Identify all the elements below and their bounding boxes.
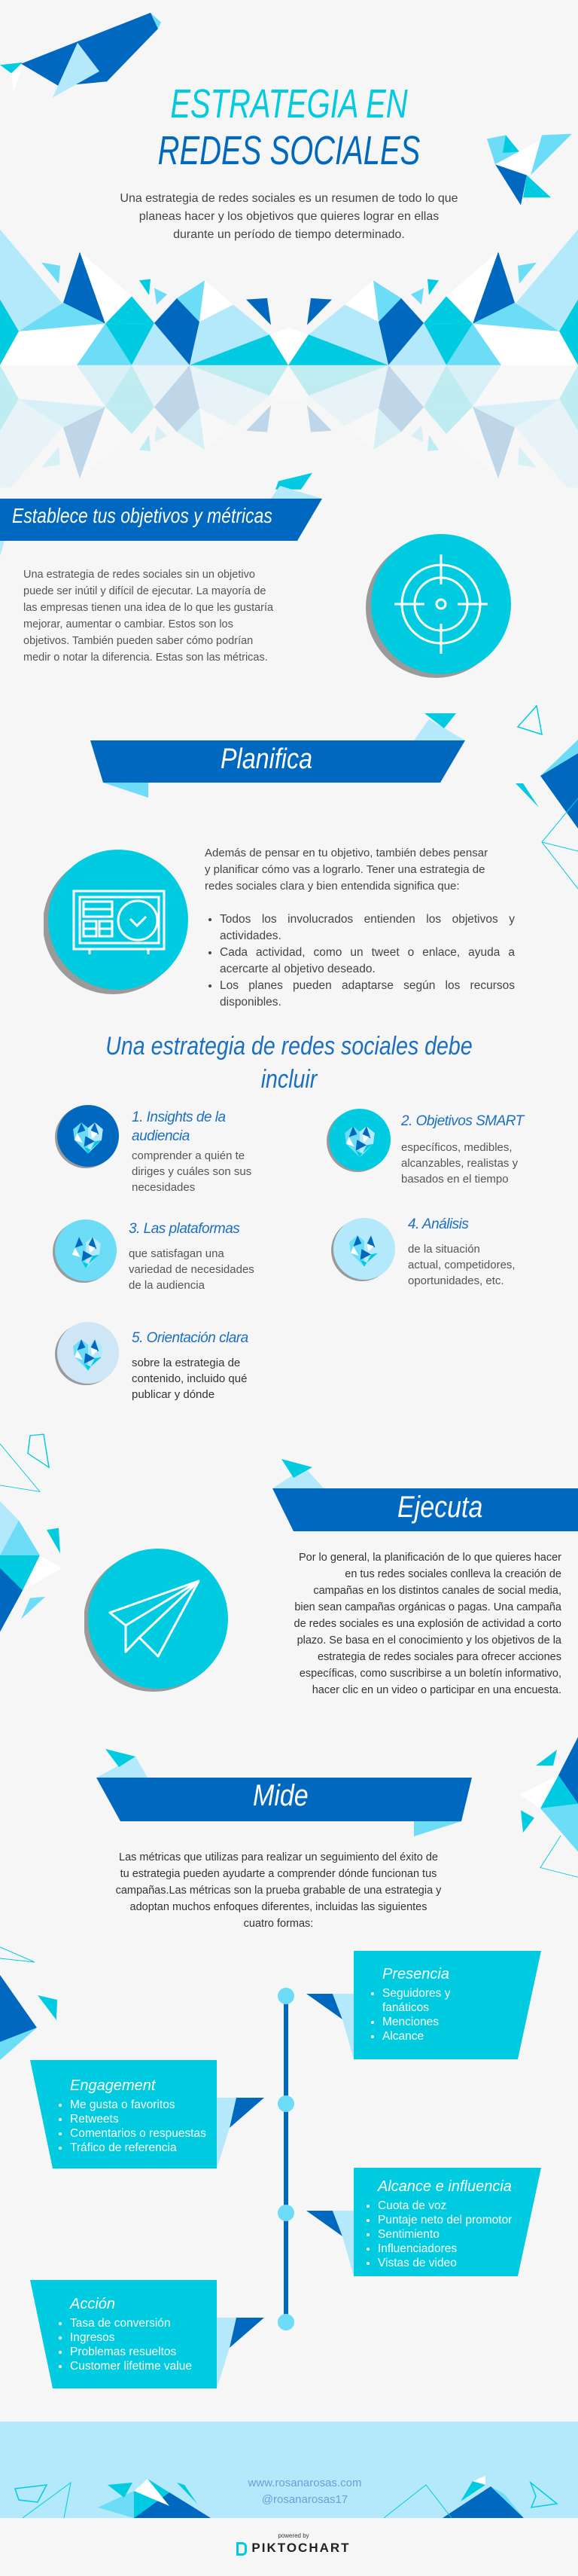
icon: heart 5 (55, 1322, 119, 1385)
box: accion: Problemas resueltos (70, 2346, 176, 2358)
banner: establece (0, 486, 322, 556)
left deco 3 (0, 1975, 37, 2042)
box: engagement: Comentarios o respuestas (70, 2127, 206, 2140)
intro text (120, 192, 458, 241)
text: ejecuta: específicas, como suscribirse a un boletín informativo, (300, 1668, 561, 1680)
item 2: smart: específicos, medibles, (401, 1141, 513, 1154)
item 5: orientacion: sobre la estrategia de (132, 1357, 240, 1369)
text: ejecuta: campañas en los distintos canales de social media, (313, 1585, 561, 1597)
intro text: planeas hacer y los objetivos que quieres lograr en ellas (139, 210, 439, 223)
item 2: smart: alcanzables, realistas y (401, 1157, 518, 1170)
text: objetivos: mejorar, aumentar o cambiar. Estos son los (23, 618, 233, 630)
text: mide: campañas.Las métricas son la prueba grabable de una estrategia y (116, 1885, 441, 1897)
box: engagement: Me gusta o favoritos (70, 2098, 175, 2111)
text: ejecuta: plazo. Se basa en el conocimiento y los objetivos de la (297, 1634, 561, 1647)
item 1: insights: comprender a quién te (132, 1149, 245, 1162)
box: alcance: Sentimiento (378, 2228, 440, 2241)
box: presencia (306, 1951, 541, 2059)
item 5: orientacion: contenido, incluido qué (132, 1372, 247, 1385)
title (158, 81, 420, 173)
item 2: smart: basados en el tiempo (401, 1173, 509, 1186)
box: alcance: Alcance e influencia (378, 2178, 512, 2195)
item 3: plataformas: 3. Las plataformas (129, 1221, 239, 1237)
item 1: insights: necesidades (132, 1181, 195, 1194)
piktochart logo: PIKTOCHART (251, 2541, 351, 2555)
intro text: durante un período de tiempo determinado. (173, 228, 405, 241)
item 3: plataformas: que satisfagan una (129, 1247, 224, 1260)
box: engagement: Retweets (70, 2113, 119, 2126)
text: objetivos: medir o notar la diferencia. Estas son las métricas. (23, 652, 268, 664)
text: ejecuta: de redes sociales es una explosión de actividad a corto (294, 1618, 561, 1630)
text: planifica: Además de pensar en tu objetivo, también debes pensar (205, 847, 488, 859)
item 5: orientacion (55, 1322, 248, 1401)
icon: heart 4 (331, 1218, 395, 1281)
text: planifica: y planificar cómo vas a lograrlo. Tener una estrategia de (205, 863, 485, 876)
icon: heart 2 (327, 1109, 391, 1172)
box: accion: Customer lifetime value (70, 2360, 192, 2373)
item 3: plataformas (53, 1219, 254, 1292)
text: ejecuta: estrategia de redes sociales para ofrecer acciones (318, 1651, 561, 1663)
icon: paper plane (84, 1549, 228, 1692)
box: presencia: Seguidores y fanáticos (382, 1987, 450, 2014)
heading: debe incluir: Una estrategia de redes sociales debe (105, 1032, 473, 1061)
item 1: insights: 1. Insights de la audiencia (132, 1109, 226, 1144)
icon: heart 1 (55, 1105, 119, 1168)
text: objetivos (23, 569, 274, 664)
item 4: analisis (331, 1216, 516, 1287)
item 3: plataformas: de la audiencia (129, 1279, 205, 1292)
box: accion: Ingresos (70, 2331, 114, 2344)
item 1: insights: diriges y cuáles son sus (132, 1165, 251, 1178)
icon: heart 3 (53, 1219, 117, 1283)
intro text: Una estrategia de redes sociales es un resumen de todo lo que (120, 192, 458, 205)
box: engagement (30, 2060, 264, 2169)
box: accion (30, 2280, 264, 2388)
banner: mide: Mide (253, 1779, 309, 1812)
background decorations (0, 12, 578, 2060)
text: mide: Las métricas que utilizas para realizar un seguimiento del éxito de (119, 1851, 438, 1863)
left deco (0, 1434, 578, 1877)
item 5: orientacion: publicar y dónde (132, 1388, 214, 1401)
item 3: plataformas: variedad de necesidades (129, 1263, 254, 1276)
item 5: orientacion: 5. Orientación clara (132, 1330, 248, 1346)
heading: debe incluir (105, 1032, 473, 1094)
banner: planifica (90, 713, 465, 798)
banner: mide (96, 1749, 472, 1836)
text: planifica: redes sociales clara y bien entendida significa que: (205, 880, 460, 893)
footer contacts (248, 2477, 361, 2506)
box: alcance: Vistas de video (378, 2257, 457, 2269)
title: ESTRATEGIA EN (170, 81, 408, 127)
banner: planifica: Planifica (221, 743, 312, 775)
text: mide (116, 1851, 441, 1930)
title: REDES SOCIALES (158, 128, 420, 173)
icon: calendar (44, 850, 188, 994)
text: planifica: Todos los involucrados entienden los objetivos y actividades. (220, 913, 515, 942)
text: mide: tu estrategia pueden ayudarte a comprender dónde funcionan tus (120, 1868, 437, 1880)
box: presencia: Alcance (382, 2030, 424, 2043)
box: presencia: Presencia (382, 1966, 449, 1982)
item 4: analisis: de la situación (408, 1243, 480, 1256)
item 4: analisis: actual, competidores, (408, 1259, 516, 1271)
text: planifica (205, 847, 515, 1009)
text: ejecuta: bien sean campañas orgánicas o pagas. Una campaña (294, 1601, 561, 1613)
box: alcance: Cuota de voz (378, 2199, 446, 2212)
text: objetivos: puede ser inútil y difícil de ejecutar. La mayoría de (23, 585, 266, 597)
text: objetivos: objetivos. También pueden saber cómo podrían (23, 635, 253, 647)
item 2: smart: 2. Objetivos SMART (401, 1113, 524, 1129)
text: objetivos: las empresas tienen una idea de lo que les gustaría (23, 602, 273, 614)
box: engagement: Tráfico de referencia (70, 2141, 177, 2154)
text: ejecuta (294, 1552, 561, 1696)
text: planifica: Los planes pueden adaptarse según los recursos disponibles. (220, 979, 515, 1009)
text: mide: adoptan muchos enfoques diferentes, incluidas las siguientes (129, 1901, 427, 1913)
banner: ejecuta (272, 1459, 578, 1531)
item 4: analisis: 4. Análisis (408, 1216, 468, 1232)
text: ejecuta: en tus redes sociales conlleva la creación de (345, 1568, 561, 1580)
text: ejecuta: hacer clic en un video o participar en una encuesta. (312, 1684, 561, 1696)
item 1: insights (55, 1105, 251, 1194)
text: ejecuta: Por lo general, la planificación de lo que quieres hacer (299, 1552, 561, 1564)
box: accion: Tasa de conversión (70, 2317, 171, 2330)
piktochart logo: powered by (278, 2532, 309, 2539)
box: alcance: Influenciadores (378, 2242, 457, 2255)
piktochart logo (236, 2532, 351, 2556)
item 2: smart (327, 1109, 525, 1186)
banner: establece: Establece tus objetivos y métricas (12, 504, 272, 527)
box: alcance: Puntaje neto del promotor (378, 2214, 512, 2227)
text: objetivos: Una estrategia de redes sociales sin un objetivo (23, 569, 255, 581)
right deco 1 (540, 753, 578, 829)
footer contacts: www.rosanarosas.com (248, 2477, 361, 2489)
box: accion: Acción (70, 2296, 115, 2312)
heading: debe incluir: incluir (261, 1065, 317, 1094)
text: planifica: Cada actividad, como un tweet o enlace, ayuda a acercarte al objetivo deseado. (220, 946, 515, 975)
footer band (0, 2422, 578, 2518)
footer contacts: @rosanarosas17 (262, 2493, 348, 2506)
box: presencia: Menciones (382, 2016, 439, 2028)
timeline (278, 1988, 294, 2330)
box: alcance (306, 2168, 541, 2276)
banner: ejecuta: Ejecuta (397, 1491, 482, 1524)
box: engagement: Engagement (70, 2077, 155, 2094)
text: mide: cuatro formas: (244, 1918, 313, 1930)
item 4: analisis: oportunidades, etc. (408, 1274, 504, 1287)
icon: target (366, 534, 511, 678)
